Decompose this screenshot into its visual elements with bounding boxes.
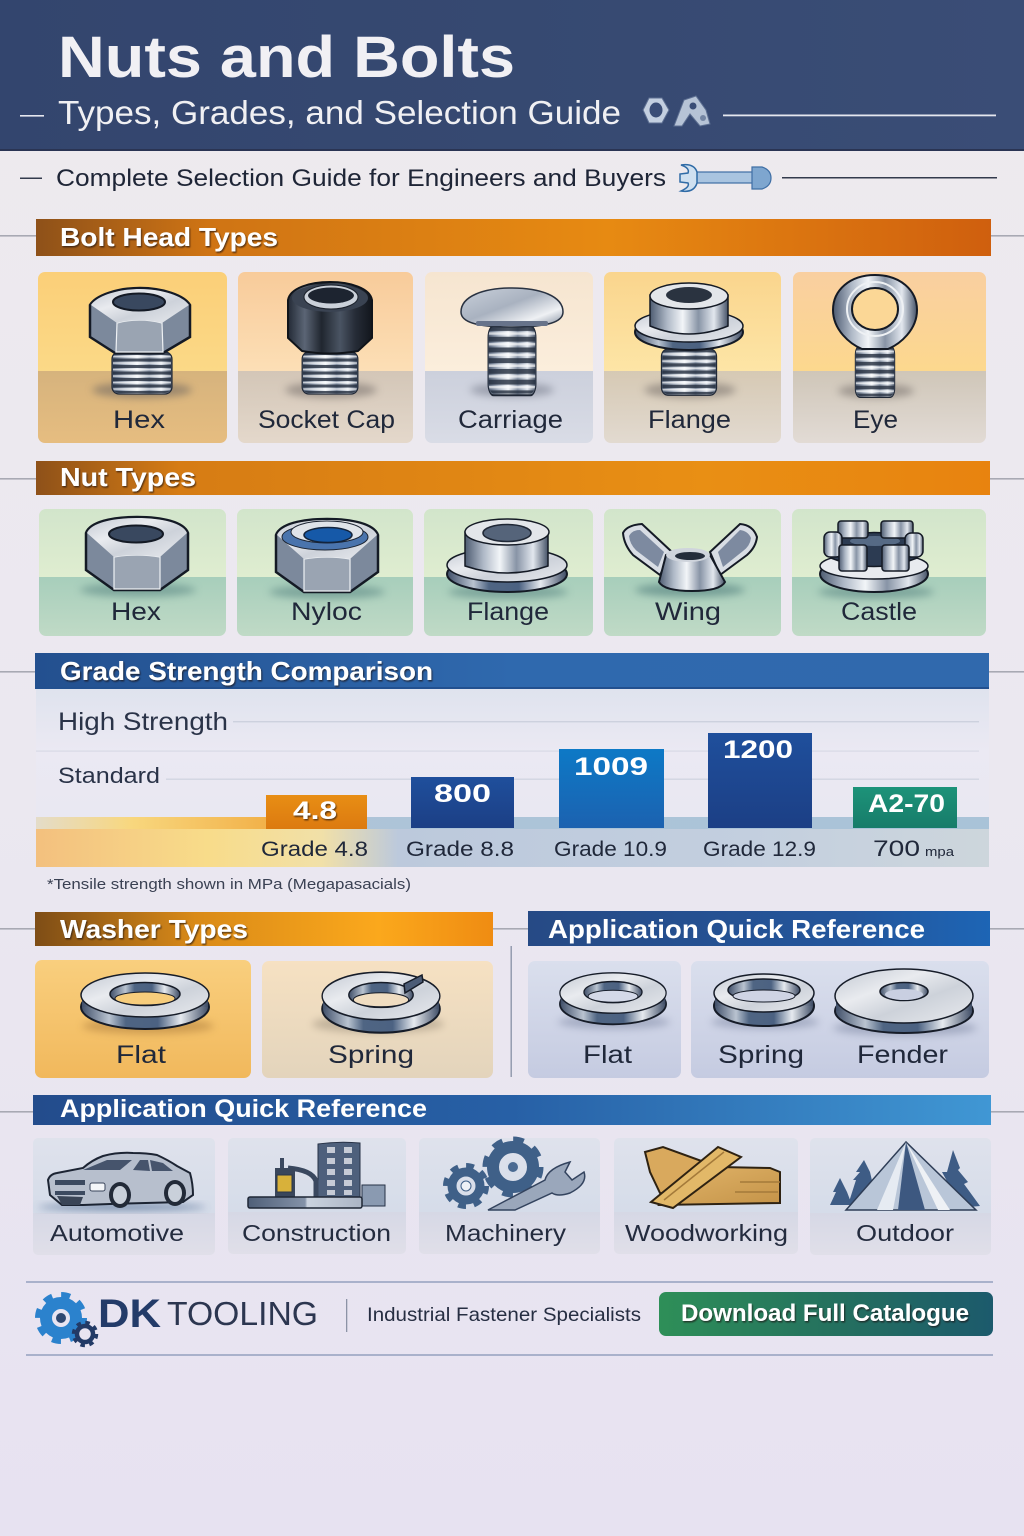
bar: grade 8.8 xyxy=(411,777,514,828)
bar: grade 12.9 xyxy=(708,733,812,828)
header banner xyxy=(0,0,1024,151)
label: Flange xyxy=(648,406,731,434)
grade labels: mpa xyxy=(925,844,955,859)
axis label: standard: Standard xyxy=(58,763,160,788)
icon: flange nut xyxy=(447,519,567,592)
icon: gears and wrench xyxy=(446,1140,585,1210)
panel: eye bolt xyxy=(793,272,986,443)
footer xyxy=(26,1281,993,1356)
vertical divider xyxy=(510,946,512,1077)
label: Spring xyxy=(328,1041,414,1069)
section heading: application quick reference (washers): Application Quick Reference xyxy=(548,914,925,944)
icon: castle nut xyxy=(820,521,928,592)
label: Carriage xyxy=(458,406,563,434)
panel: construction xyxy=(228,1138,406,1254)
label: Castle xyxy=(841,598,917,626)
label: Flat xyxy=(583,1041,632,1069)
icon: eye bolt xyxy=(833,275,917,397)
icon: nut and wing xyxy=(643,96,710,126)
bar chart: grade strength xyxy=(36,689,989,867)
icon: flat washer xyxy=(560,973,666,1024)
grade labels: Grade 12.9 xyxy=(703,838,816,861)
section heading: washer types xyxy=(0,912,1024,946)
grade labels: 700 xyxy=(873,836,920,861)
label: Eye xyxy=(853,406,898,434)
label: Hex xyxy=(111,598,162,626)
panel: flat washer, application xyxy=(528,961,681,1078)
panel: castle nut xyxy=(792,509,986,636)
icon: car xyxy=(48,1153,193,1208)
panel: spring washer xyxy=(262,961,493,1078)
label: Socket Cap xyxy=(258,406,395,434)
button: download catalogue xyxy=(659,1292,993,1336)
section heading: bolt head types xyxy=(0,219,1024,256)
section heading: bolt head types: Bolt Head Types xyxy=(60,222,278,252)
bar: grade 10.9 xyxy=(559,749,664,828)
icon: wood planks xyxy=(645,1147,780,1208)
bar: A2-70: A2-70 xyxy=(868,790,945,818)
bar: A2-70 xyxy=(853,787,957,828)
icon: construction site xyxy=(248,1142,385,1208)
label: Woodworking xyxy=(625,1220,788,1246)
label: Outdoor xyxy=(856,1220,954,1246)
section heading: grade strength comparison xyxy=(0,653,1024,689)
label: Flat xyxy=(116,1041,166,1069)
title: Nuts and Bolts xyxy=(58,25,515,90)
subtitle: Types, Grades, and Selection Guide xyxy=(58,94,621,131)
panel: woodworking xyxy=(614,1138,798,1254)
logo: wordmark: TOOLING xyxy=(167,1295,318,1332)
tagline row xyxy=(20,165,997,192)
grade labels: Grade 4.8 xyxy=(261,838,368,861)
icon: wrench xyxy=(680,165,771,191)
icon: socket cap bolt xyxy=(288,282,372,394)
icon: hex bolt xyxy=(90,288,190,394)
section heading: nut types: Nut Types xyxy=(60,462,196,492)
section heading: nut types xyxy=(0,461,1024,495)
logo: wordmark xyxy=(98,1292,318,1336)
label: Construction xyxy=(242,1220,391,1246)
label: fender: Fender xyxy=(857,1041,948,1069)
panel: machinery xyxy=(419,1138,600,1254)
grade labels xyxy=(261,836,955,861)
icon: tent and trees xyxy=(830,1142,980,1210)
icon: flat washer xyxy=(81,973,209,1029)
panel: automotive xyxy=(33,1138,215,1255)
label: Nyloc xyxy=(291,598,362,626)
panel: outdoor xyxy=(810,1138,991,1255)
bar: grade 8.8: 800 xyxy=(434,780,491,808)
logo: gears xyxy=(38,1295,96,1346)
panel: flange bolt xyxy=(604,272,781,443)
label: Flange xyxy=(467,598,549,626)
footnote: *Tensile strength shown in MPa (Megapasacials) xyxy=(47,877,411,893)
panel: hex nut xyxy=(39,509,226,636)
icon: hex nut xyxy=(86,517,188,590)
logo: wordmark: DK xyxy=(98,1292,161,1336)
bar: grade 10.9: 1009 xyxy=(574,753,648,781)
button: download catalogue: Download Full Catalogue xyxy=(681,1300,969,1327)
panel: spring and fender washers, application xyxy=(691,961,989,1078)
grade labels: Grade 10.9 xyxy=(554,838,667,861)
tagline row: Complete Selection Guide for Engineers and Buyers xyxy=(56,165,666,192)
icon: spring washer xyxy=(322,972,440,1033)
panel: flange nut xyxy=(424,509,593,636)
section heading: grade strength comparison: Grade Strength Comparison xyxy=(60,656,433,686)
icon: flange bolt xyxy=(635,283,743,395)
icon: spring washer xyxy=(714,974,814,1026)
axis label: high strength: High Strength xyxy=(58,708,228,736)
icon: carriage bolt xyxy=(461,288,563,395)
icon: wing nut xyxy=(623,524,757,591)
label: spring: Spring xyxy=(718,1041,804,1069)
section heading: application quick reference (washers) xyxy=(528,911,990,946)
label: Hex xyxy=(113,406,166,434)
panel: wing nut xyxy=(604,509,781,636)
panel: carriage bolt xyxy=(425,272,593,443)
panel: socket cap bolt xyxy=(238,272,413,443)
bar: grade 4.8 xyxy=(266,795,367,829)
label: Machinery xyxy=(445,1220,567,1246)
panel: hex bolt xyxy=(38,272,227,443)
icon: nyloc nut xyxy=(276,519,378,592)
tagline: Industrial Fastener Specialists xyxy=(367,1304,641,1326)
bar: grade 4.8: 4.8 xyxy=(293,797,337,825)
label: Automotive xyxy=(50,1220,184,1246)
panel: flat washer xyxy=(35,960,251,1078)
section heading: washer types: Washer Types xyxy=(60,914,248,944)
label: Wing xyxy=(655,598,721,626)
section heading: application quick reference xyxy=(0,1095,1024,1125)
bar: grade 12.9: 1200 xyxy=(723,736,793,764)
panel: nyloc nut xyxy=(237,509,413,636)
icon: fender washer xyxy=(835,969,973,1033)
section heading: application quick reference: Application Quick Reference xyxy=(60,1095,427,1123)
grade labels: Grade 8.8 xyxy=(406,838,514,861)
